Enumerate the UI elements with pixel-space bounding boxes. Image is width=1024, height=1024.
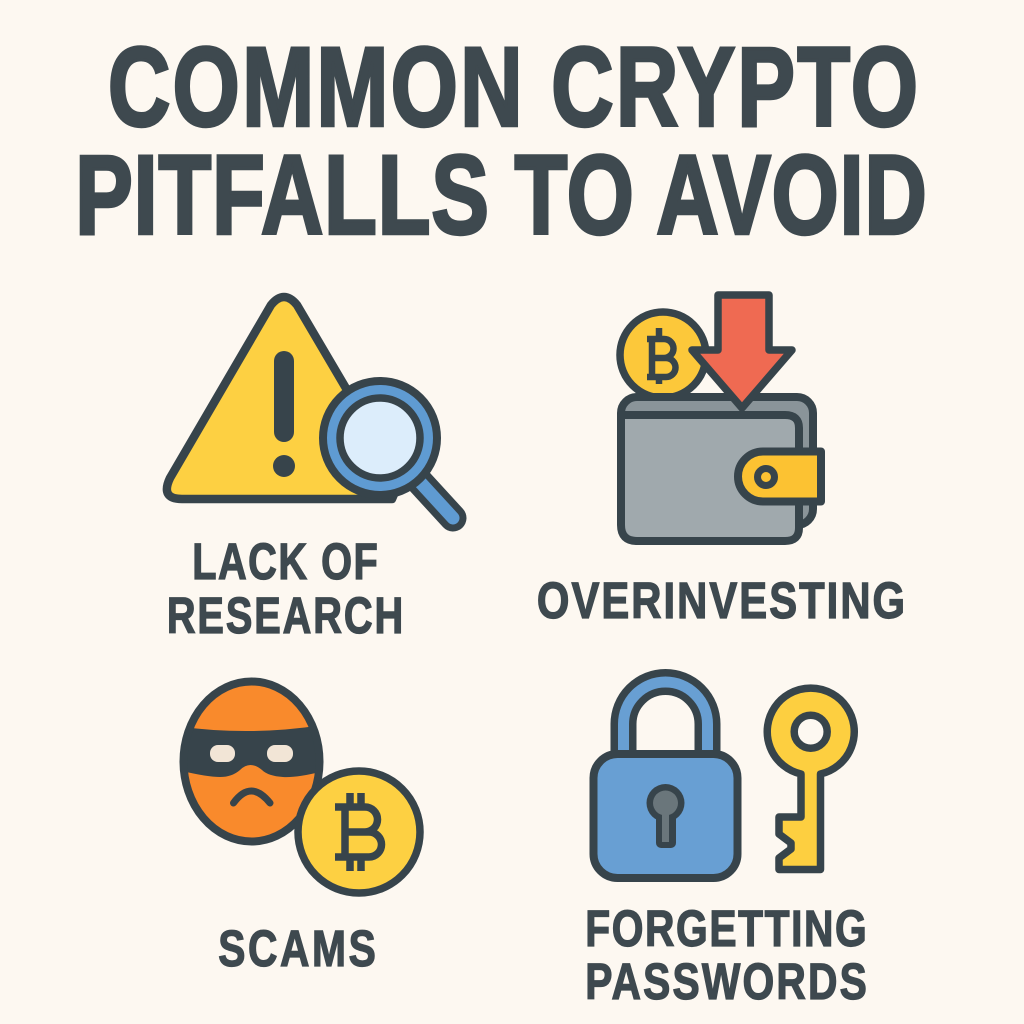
- title: [75, 26, 927, 258]
- magnifier: [323, 381, 453, 518]
- padlock: [594, 682, 738, 878]
- label: lack of research: [167, 533, 403, 644]
- key: [767, 688, 854, 870]
- title: COMMON CRYPTO: [108, 26, 918, 150]
- label: scams: SCAMS: [218, 920, 376, 977]
- label: forgetting passwords: FORGETTING: [585, 900, 867, 957]
- label: lack of research: LACK OF: [192, 533, 378, 590]
- coin: [620, 312, 706, 398]
- wallet: [621, 397, 813, 541]
- label: overinvesting: OVERINVESTING: [537, 572, 905, 629]
- masked face: [170, 682, 335, 842]
- clasp: [738, 452, 821, 502]
- icon: wallet with coin and arrow: [620, 295, 821, 541]
- icon: warning triangle with magnifier: [167, 297, 453, 518]
- bitcoin coin: [298, 771, 420, 893]
- label: forgetting passwords: PASSWORDS: [585, 953, 867, 1010]
- label: forgetting passwords: [585, 900, 867, 1010]
- label: lack of research: RESEARCH: [167, 587, 403, 644]
- exclamation mark: [273, 351, 295, 477]
- warning triangle: [167, 297, 400, 499]
- icon: scammer with coin: [170, 682, 420, 893]
- icon: padlock and key: [594, 682, 854, 878]
- title: PITFALLS TO AVOID: [75, 134, 927, 258]
- down arrow: [692, 295, 792, 408]
